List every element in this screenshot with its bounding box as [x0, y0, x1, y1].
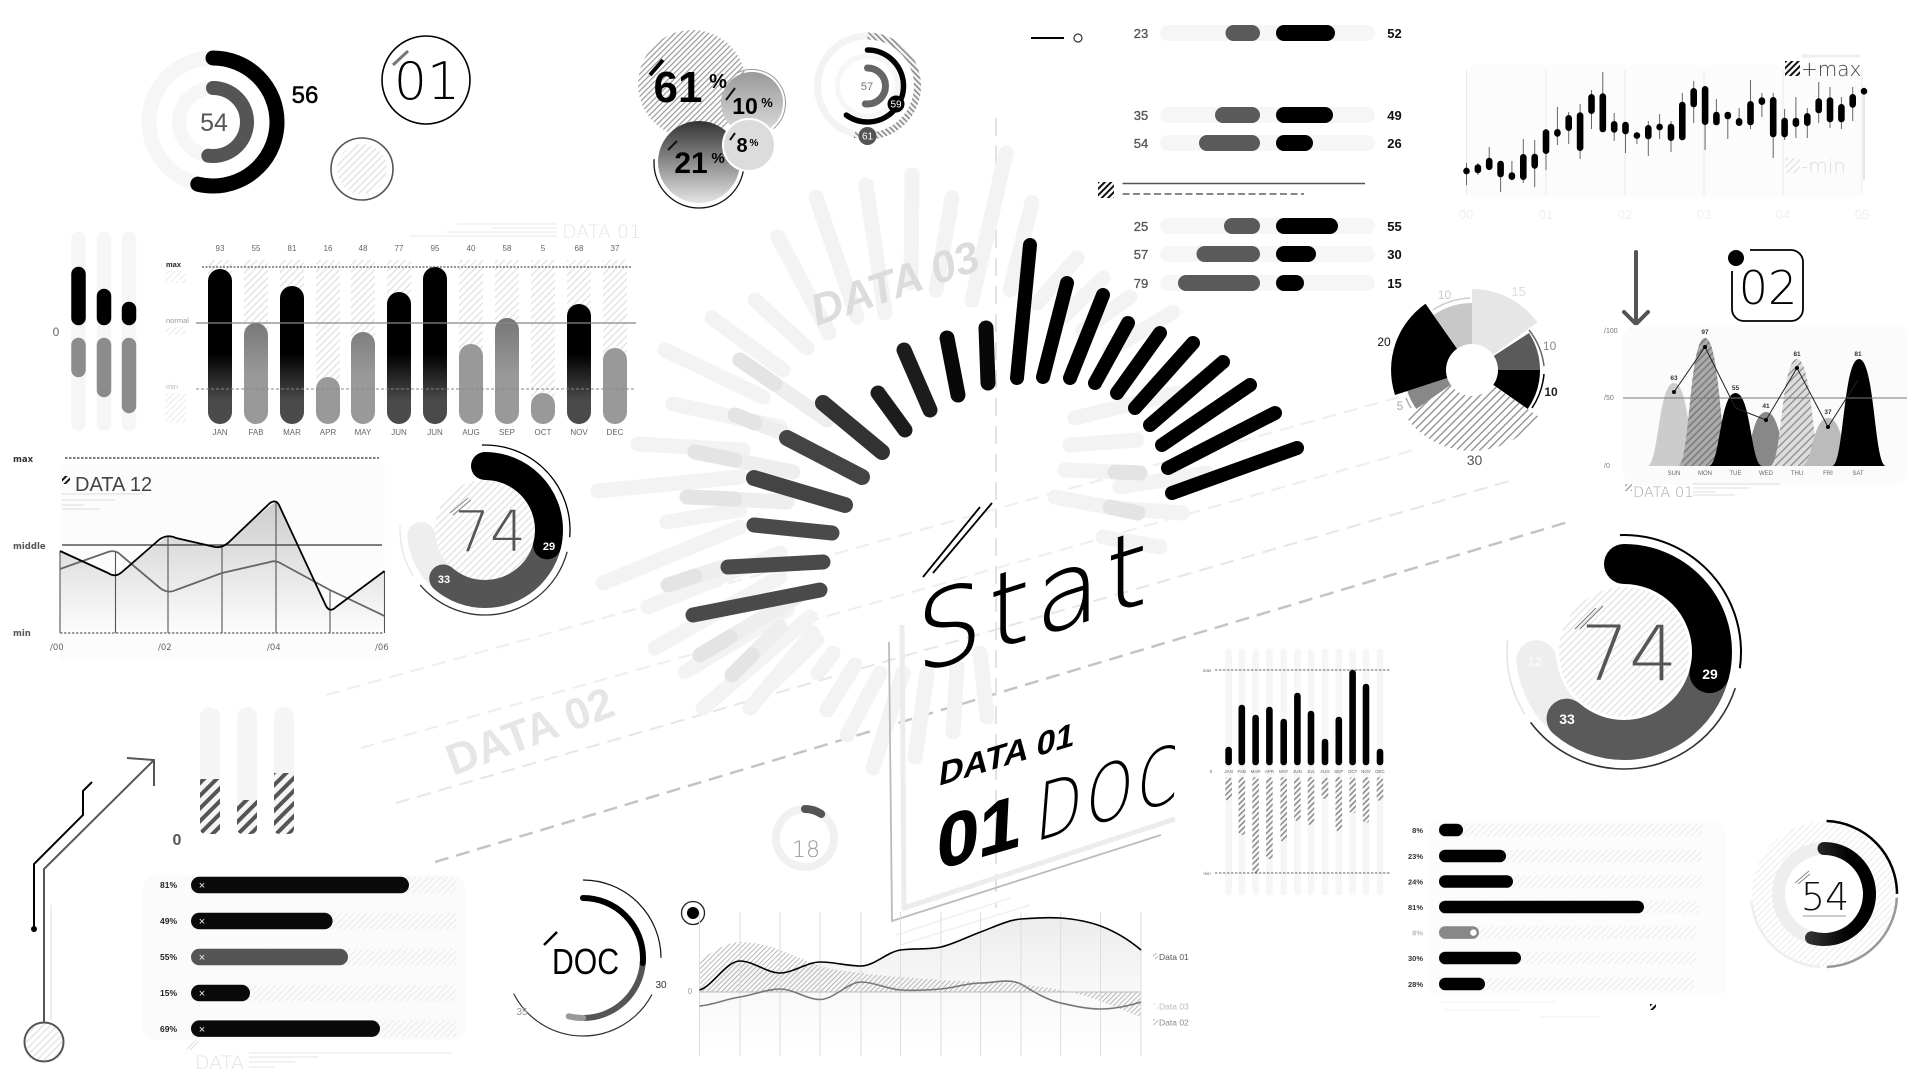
chart: polar sectors: 15 [1511, 284, 1526, 299]
chart: weekly bell curves: FRI [1823, 471, 1833, 477]
chart: candlestick: 00 [1459, 207, 1473, 222]
chart: horizontal percentage bars left: × [199, 952, 205, 964]
donut: target 57: 59 [890, 100, 902, 110]
donut: 54 right: 54 [1801, 875, 1849, 919]
chart: paired pill bars: 30 [1387, 247, 1402, 262]
heading: DATA 01: DATA 01 [562, 221, 641, 243]
chart: monthly bars: 58 [503, 244, 512, 253]
chart: monthly up and down columns: APR [1265, 769, 1275, 774]
chart: horizontal percentage bars left: 55% [160, 952, 177, 962]
bubbles: percentages: 8 [736, 135, 748, 157]
chart: monthly bars: APR [320, 428, 336, 437]
chart: monthly bars: AUG [462, 428, 480, 437]
badge: 02: 02 [1739, 261, 1797, 315]
marker: line and circle [1031, 34, 1082, 42]
chart: DATA 12 line chart [13, 455, 389, 660]
legend: wave series: Data 01 [1159, 952, 1189, 962]
chart: horizontal percentage bars left: × [199, 1024, 205, 1036]
chart: weekly bell curves: 41 [1762, 403, 1770, 410]
bubbles: percentages: % [711, 150, 725, 167]
chart: paired pill bars [1098, 25, 1402, 291]
donut: 74 large: 12 [1528, 654, 1542, 669]
chart: candlestick: 04 [1776, 207, 1790, 222]
legend: wave series: Data 02 [1159, 1018, 1189, 1028]
arrow: circuit up [24, 758, 154, 1062]
background guide lines [326, 118, 1568, 908]
chart: monthly bars: FAB [248, 428, 264, 437]
chart: monthly bars: min [166, 382, 178, 391]
badge: 02 [1728, 250, 1803, 321]
chart: weekly bell curves: /100 [1604, 328, 1618, 335]
chart: polar sectors: 20 [1377, 335, 1391, 349]
icon: hatched circle [331, 138, 393, 200]
chart: polar sectors: 10 [1543, 339, 1557, 353]
chart: monthly up and down columns: max [1203, 668, 1212, 673]
heading: DATA 01: DATA 01 [937, 715, 1077, 794]
chart: weekly bell curves: THU [1791, 471, 1803, 477]
chart: monthly bars: 77 [395, 244, 404, 253]
legend: -min: -min [1801, 154, 1846, 178]
donut: 74 small: 33 [438, 574, 450, 586]
chart: paired pill bars: 54 [1134, 136, 1148, 151]
chart: paired pill bars: 55 [1387, 219, 1402, 234]
chart: weekly bell curves [1604, 325, 1908, 501]
chart: weekly bell curves: 81 [1854, 351, 1862, 358]
donut: target 57: 57 [861, 81, 873, 93]
chart: monthly bars: 93 [216, 244, 225, 253]
donut: 74 large: 33 [1559, 711, 1575, 727]
chart: horizontal percentage bars left: 81% [160, 880, 177, 890]
chart: horizontal percentage bars left: × [199, 916, 205, 928]
donut: 74 large: 29 [1702, 666, 1718, 682]
chart: paired pill bars: 57 [1134, 247, 1148, 262]
legend: wave series [1153, 952, 1189, 1028]
gauge: DOC: 35 [516, 1007, 528, 1018]
title: Stat: Stat [916, 504, 1153, 699]
donut: target 57: 61 [862, 132, 873, 142]
chart: monthly up and down columns: NOV [1361, 769, 1371, 774]
chart: monthly up and down columns: JUL [1307, 769, 1315, 774]
chart: monthly bars: JAN [212, 428, 228, 437]
heading: DATA 12 [62, 474, 152, 509]
gauge: DOC: 30 [655, 980, 667, 991]
heading: 01: 01 [935, 779, 1023, 887]
chart: polar sectors: 30 [1467, 452, 1482, 468]
radial chart: faded background bars [598, 153, 1207, 768]
icon: target [682, 902, 704, 924]
chart: monthly bars: OCT [535, 428, 552, 437]
donut: target 57 [818, 36, 918, 145]
chart: horizontal percentage bars left: 15% [160, 988, 177, 998]
chart: candlestick: 03 [1697, 207, 1711, 222]
chart: horizontal percentage bars right: 81% [1408, 903, 1423, 912]
donut: 74 small: 29 [543, 541, 555, 553]
chart: weekly bell curves: 97 [1701, 329, 1709, 336]
gauge: 18: 18 [792, 838, 820, 863]
chart: monthly bars: MAY [355, 428, 372, 437]
chart: monthly up and down columns: min [1203, 871, 1211, 876]
chart: polar sectors: 10 [1438, 288, 1451, 302]
heading: DATA: DATA [195, 1052, 244, 1074]
chart: monthly bars: 48 [359, 244, 368, 253]
chart: weekly bell curves: TUE [1730, 471, 1742, 477]
chart: polar sectors: 10 [1544, 385, 1558, 399]
chart: monthly bars: MAR [283, 428, 301, 437]
chart: monthly up and down columns: 0 [1210, 769, 1213, 774]
chart: monthly bars: JUN [427, 428, 443, 437]
heading: DATA 01 [1625, 484, 1780, 501]
chart: monthly up and down columns: OCT [1348, 769, 1358, 774]
chart: weekly bell curves: MON [1698, 471, 1712, 477]
donut: 54 / 56: 54 [200, 109, 228, 137]
chart: hatched columns [173, 717, 294, 849]
chart: monthly bars: 40 [467, 244, 476, 253]
chart: monthly bars: max [166, 260, 182, 269]
chart: paired pill bars: 26 [1387, 136, 1402, 151]
frame: document outline [889, 625, 1175, 945]
chart: DATA 12 line chart: /00 [50, 643, 64, 653]
chart: monthly up and down columns: SEP [1334, 769, 1343, 774]
donut: 74 small [397, 442, 573, 618]
gauge: DOC: DOC [552, 941, 619, 982]
heading: DOC clipped: DOC [1032, 725, 1187, 861]
chart: monthly up and down columns: DEC [1375, 769, 1385, 774]
chart: horizontal percentage bars right: 23% [1408, 852, 1423, 861]
chart: paired pill bars: 25 [1134, 219, 1148, 234]
chart: monthly bars: 16 [324, 244, 333, 253]
chart: monthly up and down columns: AUG [1320, 769, 1330, 774]
chart: candlestick [1459, 56, 1869, 222]
chart: monthly bars: 5 [541, 244, 546, 253]
chart: paired pill bars: 15 [1387, 276, 1402, 291]
chart: monthly bars: SEP [499, 428, 515, 437]
chart: monthly bars [165, 221, 641, 437]
donut: 54 / 56: 56 [292, 82, 318, 109]
chart: horizontal percentage bars right: 30% [1408, 954, 1423, 963]
chart: horizontal percentage bars left: × [199, 880, 205, 892]
chart: horizontal percentage bars left [143, 875, 465, 1074]
donut: 74 large [1503, 531, 1745, 773]
chart: horizontal percentage bars right: 24% [1408, 878, 1423, 886]
heading: DATA 03: DATA 03 [804, 232, 986, 335]
chart: monthly bars: 95 [431, 244, 440, 253]
chart: horizontal percentage bars left: × [199, 988, 205, 1000]
chart: DATA 12 line chart: /04 [267, 643, 281, 653]
chart: hatched columns: 0 [173, 832, 182, 849]
donut: 74 small: 74 [454, 500, 526, 565]
chart: monthly up and down columns: JAN [1224, 769, 1233, 774]
chart: small up and down bars: 0 [53, 325, 60, 339]
radial chart: dark foreground bars [693, 245, 1297, 615]
chart: monthly bars: NOV [570, 428, 588, 437]
heading: DATA 02: DATA 02 [439, 678, 621, 785]
chart: monthly bars: 37 [611, 244, 620, 253]
chart: weekly bell curves: SUN [1668, 471, 1680, 477]
bubbles: percentages: 61 [654, 63, 702, 112]
chart: monthly bars: JUN [391, 428, 407, 437]
badge: 01: 01 [394, 52, 460, 112]
chart: DATA 12 line chart: min [13, 629, 31, 639]
chart: candlestick: 02 [1618, 207, 1632, 222]
chart: paired pill bars: 52 [1387, 26, 1402, 41]
chart: weekly bell curves: 81 [1793, 351, 1801, 358]
donut: 74 large: 74 [1581, 609, 1677, 698]
badge: 01 [382, 36, 470, 124]
chart: DATA 12 line chart: /02 [158, 643, 172, 653]
chart: paired pill bars: 49 [1387, 108, 1402, 123]
heading: DATA 12: DATA 12 [75, 474, 152, 496]
heading: DATA 01: DATA 01 [1633, 485, 1693, 501]
chart: small up and down bars [53, 239, 129, 424]
chart: monthly bars: normal [166, 316, 189, 325]
chart: polar sectors [1377, 284, 1558, 468]
chart: weekly bell curves: 37 [1824, 409, 1832, 416]
chart: weekly bell curves: 63 [1670, 375, 1678, 382]
donut: 54 / 56 [149, 58, 318, 186]
bubbles: percentages [638, 30, 798, 208]
legend: wave series: Data 03 [1159, 1002, 1189, 1012]
chart: monthly bars: 68 [575, 244, 584, 253]
chart: horizontal percentage bars left: 49% [160, 916, 177, 926]
chart: weekly bell curves: /50 [1604, 395, 1614, 402]
chart: monthly up and down columns: JUN [1293, 769, 1302, 774]
heading: DATA [187, 1040, 452, 1074]
chart: horizontal percentage bars right [1408, 822, 1726, 1017]
chart: paired pill bars: 79 [1134, 276, 1148, 291]
chart: horizontal percentage bars right: 28% [1408, 980, 1423, 989]
legend: +max: +max [1801, 57, 1861, 81]
chart: weekly bell curves: WED [1759, 471, 1774, 477]
chart: monthly bars: DEC [607, 428, 624, 437]
bubbles: percentages: % [709, 71, 727, 93]
chart: horizontal percentage bars right: 8% [1412, 929, 1423, 938]
chart: monthly bars: 55 [252, 244, 261, 253]
chart: candlestick: 05 [1855, 207, 1869, 222]
chart: monthly bars: 81 [288, 244, 297, 253]
chart: paired pill bars: 23 [1134, 26, 1148, 41]
bubbles: percentages: % [750, 138, 759, 149]
chart: weekly bell curves: /0 [1604, 463, 1610, 470]
bubbles: percentages: 21 [674, 147, 708, 180]
chart: paired pill bars: 35 [1134, 108, 1148, 123]
chart: monthly up and down columns: FAB [1238, 769, 1246, 774]
gauge: 18 [776, 809, 834, 867]
chart: weekly bell curves: 55 [1732, 385, 1739, 392]
chart: polar sectors: 5 [1397, 399, 1404, 413]
chart: monthly up and down columns: MAY [1279, 769, 1288, 774]
chart: monthly up and down columns: MAR [1251, 769, 1261, 774]
heading: DATA 01 [410, 221, 641, 243]
donut: 54 right [1748, 818, 1900, 970]
chart: DATA 12 line chart: max [13, 455, 34, 465]
chart: weekly bell curves: SAT [1852, 471, 1864, 477]
chart: horizontal percentage bars left: 69% [160, 1024, 177, 1034]
arrow: down [1624, 252, 1648, 324]
bubbles: percentages: % [761, 95, 773, 110]
chart: DATA 12 line chart: /06 [375, 643, 389, 653]
chart: wave area [688, 912, 1189, 1056]
bubbles: percentages: 10 [732, 93, 758, 119]
chart: wave area: 0 [688, 987, 693, 996]
gauge: DOC [505, 880, 667, 1036]
chart: DATA 12 line chart: middle [13, 542, 46, 552]
chart: horizontal percentage bars right: 8% [1412, 826, 1423, 835]
chart: candlestick: 01 [1539, 207, 1553, 222]
chart: monthly up and down columns [1203, 652, 1391, 892]
